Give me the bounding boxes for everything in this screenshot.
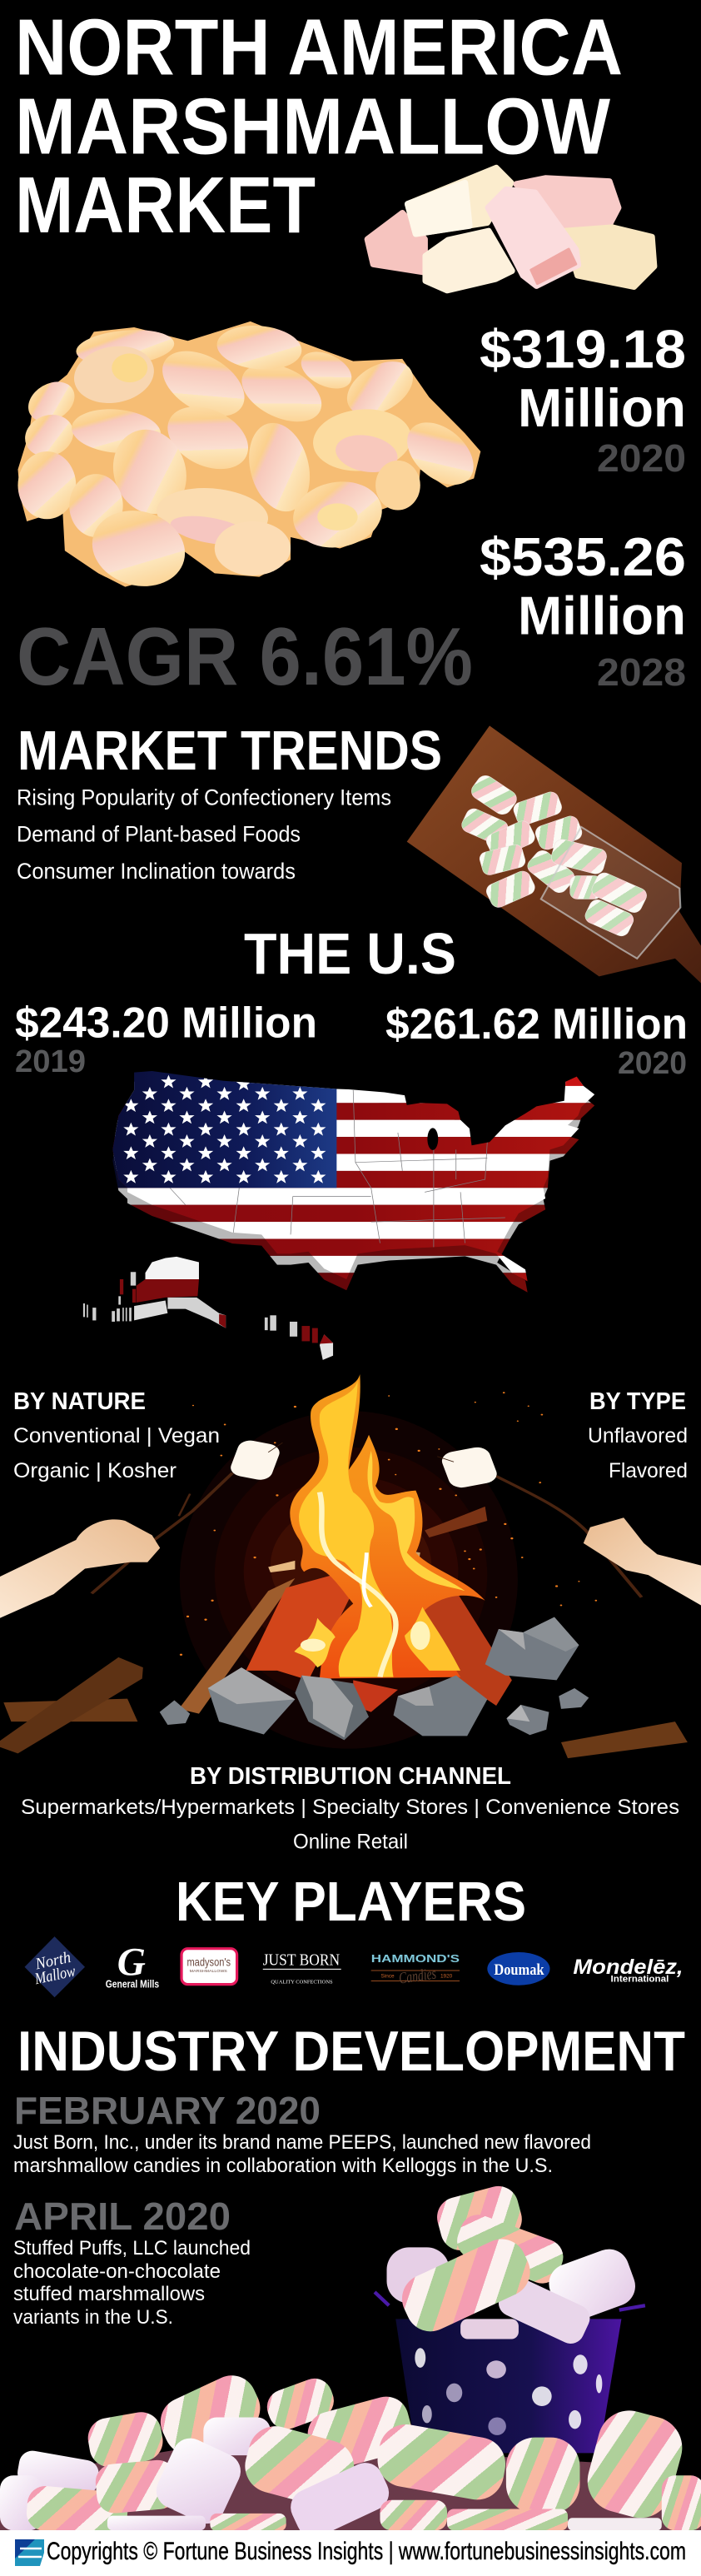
logo: Fortune Business Insights [15,2539,44,2566]
segment: by distribution channel: Supermarkets/Hypermarkets | Specialty Stores | Convenience Stores [21,1796,679,1819]
stat: U.S 2020: $261.62 Million [385,1000,688,1049]
development: April 2020: APRIL 2020 [14,2195,231,2238]
logo: North Mallow: North [33,1949,72,1974]
photo: wooden board with marshmallows and jar [407,725,701,983]
stat: U.S 2020: 2020 [618,1046,687,1081]
segment: by distribution channel [21,1763,679,1854]
logo: Hammond's: Candies [398,1966,437,1988]
flames [290,1374,485,1678]
segment: by nature: Conventional | Vegan [13,1424,220,1447]
stat: 2020 market size: $319.18 [480,319,686,380]
logo: Madyson's: madyson's [186,1956,231,1969]
stat: CAGR: CAGR 6.61% [17,610,473,702]
development: February 2020: Just Born, Inc., under its brand name PEEPS, launched new flavored [13,2131,591,2154]
logs in fire [179,1507,512,1714]
segment: by nature [13,1388,220,1482]
development: April 2020: chocolate-on-chocolate [13,2260,221,2283]
logo: Doumak [487,1952,550,1986]
illustration: firewood logs [0,1657,688,1758]
heading: the U.S: THE U.S [244,921,456,986]
logo: Doumak: Doumak [494,1961,544,1979]
development: April 2020: Stuffed Puffs, LLC launched [13,2237,251,2260]
rocks [160,1617,589,1740]
photo: twisted marshmallow pile [17,321,485,596]
development: February 2020: marshmallow candies in collaboration with Kelloggs in the U.S. [13,2155,553,2177]
segment: by nature: Organic | Kosher [13,1459,176,1482]
logo: Hammond's: Since [381,1974,395,1980]
fire glow [180,1411,518,1749]
stat: 2028 market size: Million [518,585,686,646]
list: market trends: Demand of Plant-based Foods [17,822,301,847]
stat: U.S 2020 [385,1000,688,1081]
segment: by type: Unflavored [588,1424,688,1447]
logos: key players [25,1936,684,1997]
logo: Mondelez: Mondelēz, [573,1956,684,1979]
development: April 2020: variants in the U.S. [13,2306,173,2329]
list: market trends: Rising Popularity of Confectionery Items [17,785,391,810]
logo: Hammond's: 1920 [440,1974,453,1980]
photo: marshmallow pile [0,2367,701,2544]
title: MARSHMALLOW [15,82,610,171]
illustration: right hand with marshmallow stick [437,1445,701,1605]
logo: Hammond's: HAMMOND'S [371,1952,460,1965]
development: April 2020: stuffed marshmallows [13,2283,205,2305]
sparks [180,1392,597,1681]
development: April 2020 [13,2195,251,2329]
logo: General Mills: General Mills [106,1977,159,1990]
stat: 2028 market size: 2028 [597,650,686,694]
segment: by distribution channel: BY DISTRIBUTION CHANNEL [190,1763,511,1790]
photo: polka-dot bucket with marshmallows [375,2181,645,2453]
logo: Just Born: QUALITY CONFECTIONS [271,1981,333,1986]
title: MARKET [15,161,316,250]
logo: Just Born [263,1951,341,1986]
list: market trends [17,785,391,884]
stat: 2028 market size: $535.26 [480,526,686,587]
logo: General Mills [106,1941,159,1990]
development: February 2020: FEBRUARY 2020 [14,2089,321,2132]
logo: General Mills: G [117,1941,146,1984]
stat: U.S 2019: 2019 [15,1044,86,1079]
logo: Mondelez: International [611,1974,669,1984]
logo: North Mallow [25,1936,85,1997]
heading: market trends: MARKET TRENDS [17,720,442,782]
logo: Madyson's: MARSHMALLOWS [190,1969,227,1974]
segment: by nature: BY NATURE [13,1388,146,1415]
map: USA flag map [107,1069,599,1298]
title [15,2,623,250]
development: February 2020 [13,2089,591,2177]
stat: 2020 market size: 2020 [597,436,686,480]
stat: U.S 2019: $243.20 Million [15,999,317,1047]
stat: 2028 market size [480,526,686,694]
heading: key players: KEY PLAYERS [176,1871,526,1933]
illustration: left hand with marshmallow stick [0,1438,282,1618]
stat: 2020 market size: Million [518,377,686,438]
illustration: pastel marshmallows [367,168,654,291]
list: market trends: Consumer Inclination towards [17,859,296,884]
logo: Hammond's [371,1952,460,1988]
segment: by distribution channel: Online Retail [293,1831,408,1854]
logo: North Mallow: Mallow [32,1962,77,1988]
illustration: campfire [160,1374,597,1749]
segment: by type: Flavored [609,1459,688,1482]
footer bar [0,2530,701,2576]
segment: by type [588,1388,688,1482]
segment: by type: BY TYPE [589,1388,686,1415]
stat: 2020 market size [480,319,686,480]
stat: U.S 2019 [15,999,317,1079]
logo: Just Born: JUST BORN [263,1951,340,1970]
logo: Madyson's [181,1949,237,1985]
title: NORTH AMERICA [15,2,623,92]
map: Alaska and Hawaii [83,1257,333,1360]
